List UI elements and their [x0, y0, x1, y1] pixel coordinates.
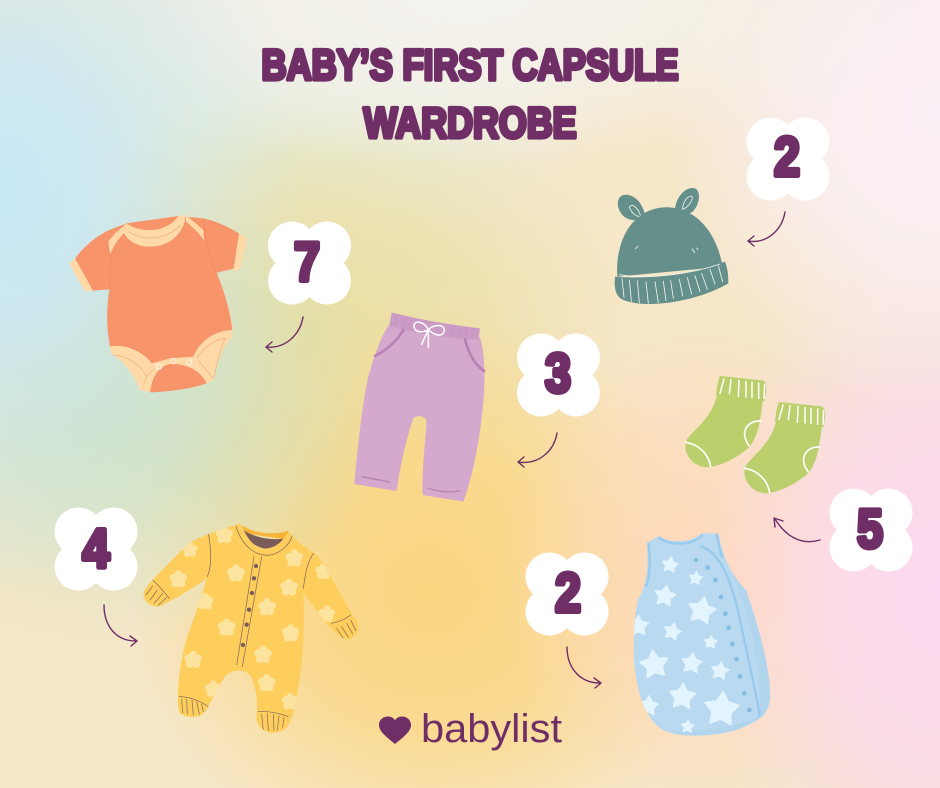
icon: yellow footed sleeper: [144, 523, 358, 733]
arrow: 5 to socks: [774, 518, 820, 542]
number badge: 3 pants: [517, 334, 600, 416]
number badge: 2 hats: 2: [774, 126, 800, 188]
icon: teal beanie with ears: [615, 188, 728, 304]
number badge: 5 socks: [830, 488, 912, 572]
title: BABY’S FIRST CAPSULE: [262, 42, 678, 90]
number badge: 4 sleepers: [54, 508, 138, 590]
arrow: 2 to hat: [748, 212, 785, 246]
number badge: 2 sleep sacks: [526, 552, 608, 636]
number badge: 7 bodysuits: [268, 222, 351, 304]
arrow: 3 to pants: [518, 433, 557, 467]
number badge: 2 hats: [746, 118, 830, 200]
babylist logo: babylist: [421, 707, 562, 751]
number badge: 3 pants: 3: [545, 342, 571, 404]
title: [262, 42, 678, 148]
number badge: 2 sleep sacks: 2: [555, 562, 581, 624]
number badge: 4 sleepers: 4: [82, 517, 110, 579]
number badge: 5 socks: 5: [857, 498, 883, 560]
arrow: 2 to sleep sack: [567, 647, 601, 688]
icon: green socks: [685, 376, 825, 493]
icon: orange bodysuit: [69, 215, 247, 392]
number badge: 7 bodysuits: 7: [294, 230, 320, 292]
icon: blue sleep sack with stars: [628, 533, 770, 736]
arrow: 4 to sleeper: [104, 605, 137, 646]
arrow: 7 to bodysuit: [266, 317, 303, 352]
title: WARDROBE: [364, 100, 576, 148]
icon: heart: [379, 716, 411, 744]
icon: purple pants: [354, 312, 484, 502]
